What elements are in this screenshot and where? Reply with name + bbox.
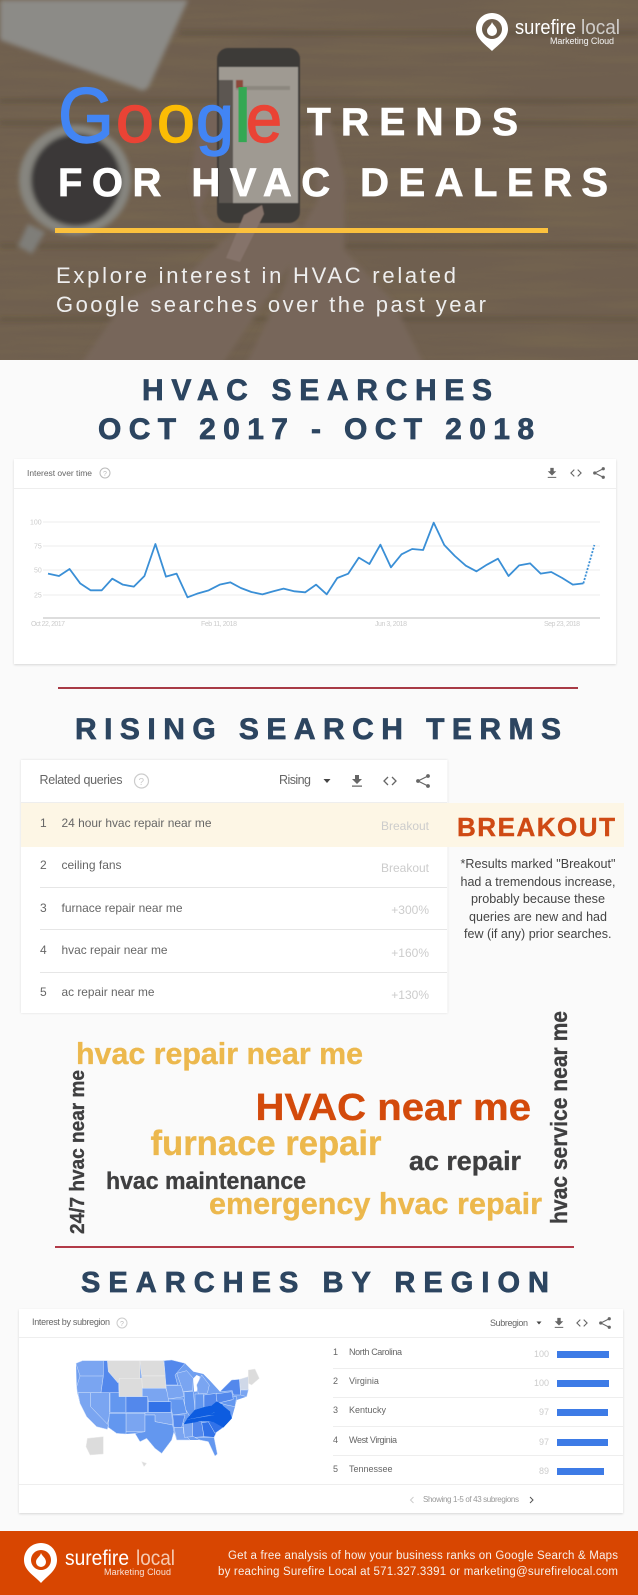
footer logo: Marketing Cloud	[104, 1567, 171, 1577]
row: West Virginia	[333, 1435, 608, 1447]
panel header: Subregion	[490, 1318, 528, 1328]
row: North Carolina: 100	[534, 1349, 549, 1359]
footer call to action: Get a free analysis of how your business ranks on Google Search & Maps	[228, 1550, 618, 1562]
table header: Rising	[279, 773, 311, 787]
row 4: 4	[40, 943, 47, 957]
row 1	[40, 816, 430, 833]
row 5: +130%	[391, 988, 429, 1002]
heading: HVAC searches: HVAC SEARCHES	[142, 374, 492, 407]
row 5: 5	[40, 985, 47, 999]
icons: toolbar	[548, 467, 605, 479]
heading: HVAC searches: OCT 2017 - OCT 2018	[98, 413, 534, 446]
logo: surefire local	[476, 13, 620, 51]
divider	[58, 687, 578, 689]
title: Google wordmark: o	[116, 81, 154, 157]
logo: surefire local: surefire	[515, 17, 576, 39]
panel header: ?	[120, 1321, 124, 1328]
footer logo: local	[136, 1547, 175, 1570]
row: Tennessee: 5	[333, 1464, 338, 1474]
heading: HVAC searches	[98, 374, 534, 446]
logo: surefire local: local	[581, 17, 620, 39]
line chart: 25	[34, 592, 42, 600]
row 3	[40, 901, 429, 917]
row: Virginia: 100	[534, 1378, 549, 1388]
title: Google wordmark: o	[157, 81, 195, 157]
table header: ?	[138, 777, 144, 788]
word cloud: furnace repair	[150, 1124, 382, 1163]
word cloud: hvac repair near me	[76, 1036, 363, 1071]
row 5	[40, 985, 429, 1002]
row 4	[40, 943, 429, 960]
row: Virginia	[333, 1376, 609, 1388]
row 3: 3	[40, 901, 47, 915]
row 2: ceiling fans	[62, 858, 122, 872]
word cloud: hvac service near me	[546, 1011, 572, 1224]
line chart: Oct 22, 2017	[31, 621, 65, 628]
row: West Virginia: West Virginia	[349, 1435, 397, 1445]
title: Google wordmark	[58, 71, 282, 159]
title: Google wordmark: e	[246, 81, 282, 157]
line chart: 100	[30, 520, 42, 526]
footer call to action	[218, 1550, 618, 1578]
row 2	[40, 858, 430, 875]
header photo: desk, laptop, coffee, phone, hands	[0, 0, 638, 380]
row: Tennessee	[333, 1464, 604, 1476]
footer logo	[24, 1543, 175, 1583]
icon: help: ?	[103, 471, 107, 478]
row: North Carolina: North Carolina	[349, 1347, 402, 1357]
word cloud: emergency hvac repair	[209, 1186, 542, 1221]
panel: footer	[0, 1531, 638, 1595]
heading: rising search terms: RISING SEARCH TERMS	[75, 713, 561, 746]
panel header: Interest by subregion	[32, 1317, 110, 1327]
line chart: Sep 23, 2018	[544, 621, 580, 628]
row: Kentucky	[333, 1405, 608, 1417]
chart title: Interest over time	[27, 468, 92, 478]
line chart: Feb 11, 2018	[201, 621, 237, 628]
row 2: 2	[40, 858, 47, 872]
callout: breakout: probably because these	[471, 891, 605, 906]
logo: surefire local: Marketing Cloud	[550, 36, 614, 46]
callout: breakout: had a tremendous increase,	[460, 874, 616, 889]
subtitle: Google searches over the past year	[56, 292, 486, 317]
panel: related queries table	[21, 760, 624, 1013]
title: TRENDS: TRENDS	[307, 101, 518, 144]
footer logo: surefire	[65, 1547, 129, 1570]
row: Tennessee: 89	[539, 1466, 549, 1476]
row: West Virginia: 97	[539, 1437, 549, 1447]
panel: interest over time chart	[14, 459, 616, 664]
highlight band	[21, 803, 624, 847]
row: Kentucky: Kentucky	[349, 1405, 387, 1415]
row 2: Breakout	[381, 861, 430, 875]
icon: help	[100, 468, 110, 478]
map: US states	[76, 1360, 259, 1467]
divider	[55, 1246, 574, 1248]
table header	[40, 773, 430, 788]
callout: breakout: *Results marked "Breakout"	[460, 856, 616, 871]
panel header	[32, 1317, 611, 1329]
title: Google wordmark: G	[58, 71, 114, 159]
word cloud: hvac maintenance	[106, 1168, 306, 1195]
row 3: furnace repair near me	[62, 901, 183, 915]
panel: interest by subregion	[19, 1309, 623, 1513]
word cloud: HVAC near me	[256, 1087, 531, 1129]
row: Virginia: Virginia	[349, 1376, 379, 1386]
row 1: 24 hour hvac repair near me	[62, 816, 212, 830]
row 1: Breakout	[381, 819, 430, 833]
callout: breakout	[457, 812, 616, 941]
yellow rule	[55, 228, 548, 233]
title: Google wordmark: g	[196, 81, 234, 157]
pagination: Showing 1-5 of 43 subregions	[423, 1495, 519, 1504]
title: Google wordmark: l	[234, 76, 251, 157]
line chart: 50	[34, 568, 42, 574]
word cloud	[67, 1011, 572, 1234]
callout: breakout: BREAKOUT	[457, 812, 615, 842]
heading: searches by region: SEARCHES BY REGION	[81, 1267, 549, 1299]
row: Tennessee: Tennessee	[349, 1464, 393, 1474]
table header: Related queries	[40, 773, 122, 787]
callout: breakout: few (if any) prior searches.	[464, 926, 612, 941]
row 4: +160%	[391, 946, 429, 960]
line chart: Jun 3, 2018	[375, 621, 407, 628]
subtitle	[56, 263, 486, 317]
row: Virginia: 2	[333, 1376, 338, 1386]
row: Kentucky: 97	[539, 1407, 549, 1417]
footer call to action: by reaching Surefire Local at 571.327.3391 or marketing@surefirelocal.com	[218, 1566, 618, 1578]
row 4: hvac repair near me	[62, 943, 168, 957]
title: FOR HVAC DEALERS: FOR HVAC DEALERS	[58, 161, 608, 205]
row: North Carolina	[333, 1347, 609, 1359]
row 1: 1	[40, 816, 47, 830]
ranked list	[333, 1347, 623, 1476]
row 3: +300%	[391, 903, 429, 917]
word cloud: ac repair	[409, 1146, 521, 1176]
word cloud: 24/7 hvac near me	[67, 1070, 89, 1234]
subtitle: Explore interest in HVAC related	[56, 263, 456, 288]
row: North Carolina: 1	[333, 1347, 338, 1357]
callout: breakout: queries are new and had	[469, 909, 607, 924]
row: Kentucky: 3	[333, 1405, 338, 1415]
row: West Virginia: 4	[333, 1435, 338, 1445]
line chart: 75	[34, 544, 42, 550]
line chart	[30, 520, 600, 628]
row 5: ac repair near me	[62, 985, 155, 999]
panel: header	[0, 0, 638, 380]
